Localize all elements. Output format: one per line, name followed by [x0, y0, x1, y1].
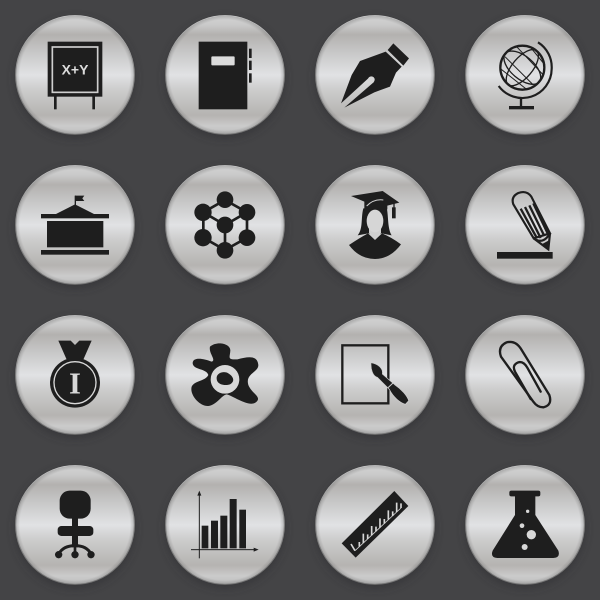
button: graduate — [315, 166, 435, 288]
button: globe — [465, 16, 585, 138]
button: ink blot — [165, 316, 285, 438]
button: molecule — [165, 166, 285, 288]
icon: pencil on line — [497, 192, 553, 259]
icon: bar chart — [191, 491, 259, 558]
icon: atomic lattice — [194, 191, 255, 259]
icon: pen nib — [341, 43, 409, 108]
button: office chair — [15, 466, 135, 588]
button: bar chart — [165, 466, 285, 588]
icon: ruler — [342, 491, 408, 558]
icon: paper clip — [500, 342, 550, 407]
icon: female graduate — [349, 191, 401, 259]
icon: first place medal: I — [69, 367, 81, 401]
icon: sheet with pen — [342, 345, 409, 404]
button: chemistry flask — [465, 466, 585, 588]
button: paper and pen — [315, 316, 435, 438]
icon: notebook — [199, 42, 252, 109]
button: school building — [15, 166, 135, 288]
button: fountain pen nib — [315, 16, 435, 138]
button: pencil — [465, 166, 585, 288]
icon: ink splat — [191, 343, 258, 406]
button: ruler — [315, 466, 435, 588]
icon: blackboard X+Y: X+Y — [62, 61, 89, 77]
icon: flask — [492, 491, 559, 558]
icon: office chair — [55, 491, 95, 558]
button: medal — [15, 316, 135, 438]
icon: desk globe — [498, 42, 552, 109]
button: notebook — [165, 16, 285, 138]
icon: school — [41, 196, 109, 255]
button: paper clip — [465, 316, 585, 438]
button: blackboard — [15, 16, 135, 138]
